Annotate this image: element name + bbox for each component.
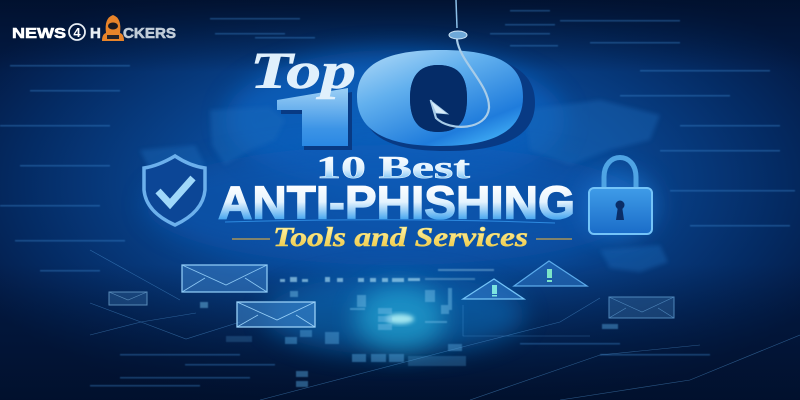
logo: 4 badge: 4 bbox=[73, 25, 81, 40]
heading: Top: Top bbox=[250, 43, 356, 100]
numeral 10 bbox=[277, 50, 535, 151]
divider line bbox=[225, 220, 555, 223]
padlock icon bbox=[582, 158, 658, 239]
envelope: small left bbox=[109, 292, 147, 305]
logo: News4Hackers: NEWS bbox=[12, 25, 66, 42]
heading: Anti-Phishing: ANTI-PHISHING bbox=[218, 176, 575, 228]
logo: 4 badge bbox=[69, 24, 85, 40]
warning triangle: lower bbox=[463, 279, 524, 299]
warning triangle: upper bbox=[514, 261, 587, 286]
central data glow bbox=[200, 269, 618, 387]
shield icon bbox=[144, 156, 205, 225]
envelope: right bbox=[609, 297, 674, 318]
logo: News4Hackers: CKERS bbox=[123, 25, 176, 42]
logo: News4Hackers bbox=[12, 15, 176, 42]
subheading: Tools and Services: Tools and Services bbox=[273, 222, 528, 252]
world map silhouette bbox=[140, 100, 668, 272]
fish hook bbox=[430, 31, 489, 127]
hook line bbox=[456, 0, 457, 28]
envelope: top left bbox=[182, 265, 267, 292]
envelope: middle bbox=[237, 302, 315, 327]
network lines bbox=[90, 250, 800, 400]
numeral 1 bbox=[277, 88, 352, 150]
logo: News4Hackers: H bbox=[90, 25, 101, 42]
heading: 10 Best: 10 Best bbox=[316, 149, 471, 185]
logo: hacker icon bbox=[102, 15, 124, 41]
gold rules bbox=[232, 238, 572, 240]
numeral 0 bbox=[357, 50, 535, 151]
